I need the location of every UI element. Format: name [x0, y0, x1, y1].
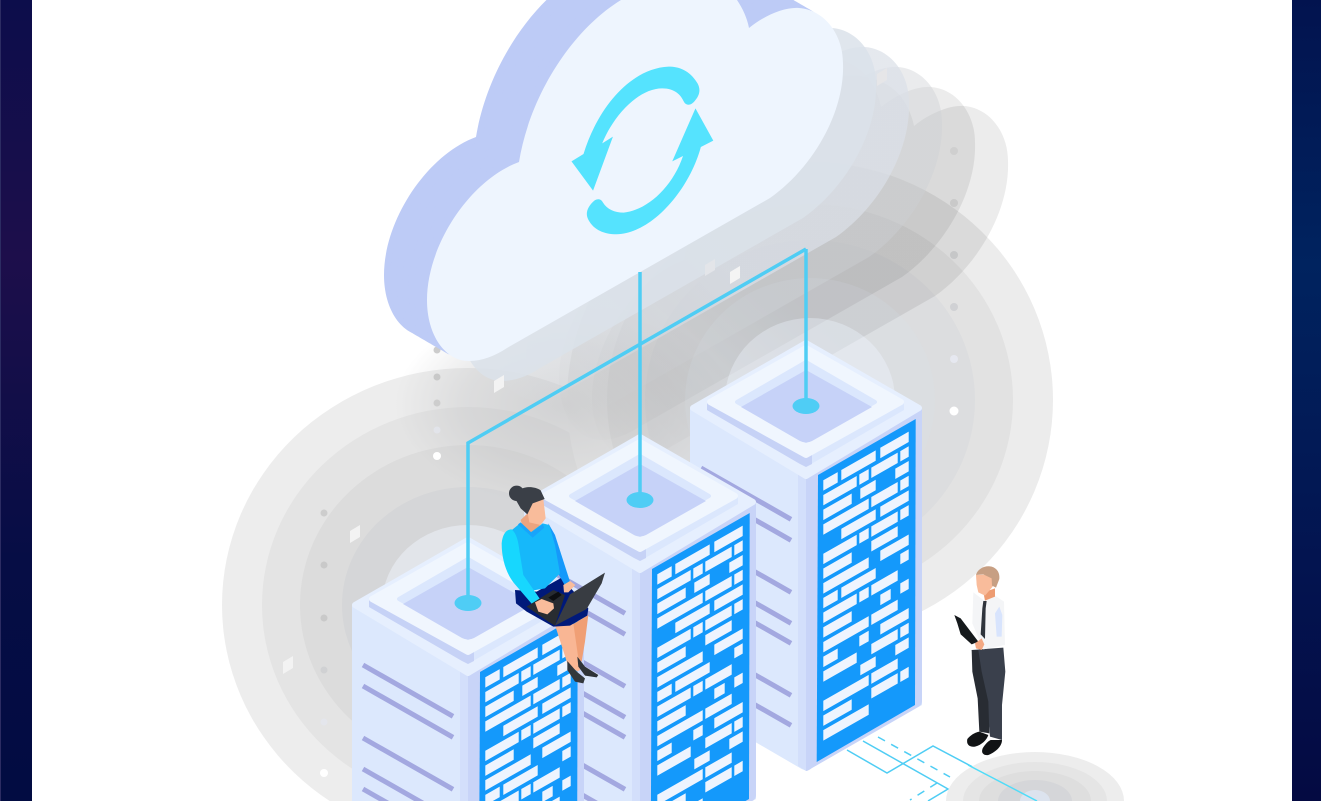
scattered dots: centre column — [433, 346, 441, 460]
trousers — [972, 648, 1005, 740]
hair — [976, 566, 999, 588]
concentric rings: left group — [222, 368, 714, 801]
shoes — [967, 732, 1002, 755]
far arm — [548, 523, 570, 586]
inner ring glow over shadows — [685, 278, 935, 522]
soft shadow under cloud — [395, 303, 735, 507]
hands — [535, 581, 575, 614]
node left — [454, 595, 482, 611]
ground circuit lines — [847, 737, 1037, 801]
sleeve shading — [995, 607, 1002, 637]
cloud extruded side — [384, 0, 836, 357]
node middle — [626, 492, 654, 508]
cloud stacked shadows — [460, 0, 1008, 459]
torso — [510, 523, 560, 592]
server tower left — [352, 537, 584, 801]
man with clipboard — [954, 566, 1005, 755]
neck — [983, 588, 995, 601]
node right — [792, 398, 820, 414]
sync icon — [571, 67, 713, 234]
server tower right — [690, 340, 922, 771]
connector cable middle — [638, 272, 642, 500]
laptop — [527, 573, 605, 626]
connector cable right — [804, 249, 808, 405]
cloud front face — [427, 0, 843, 361]
collar — [518, 522, 544, 538]
face — [976, 574, 993, 596]
cloud — [384, 0, 843, 361]
server tower middle — [524, 434, 756, 801]
tie — [981, 601, 987, 639]
left dark band — [0, 0, 32, 801]
small white tiles — [283, 68, 887, 674]
scattered dots: right column — [950, 147, 958, 416]
shirt — [972, 592, 1005, 649]
legs — [572, 615, 588, 662]
hair — [509, 486, 545, 514]
concentric rings: right group — [567, 162, 1053, 638]
woman with laptop — [502, 486, 605, 683]
hand — [975, 638, 984, 650]
right dark band — [1292, 0, 1321, 801]
connector cable left and bridge — [468, 249, 806, 603]
clipboard — [954, 615, 978, 644]
ground rings — [946, 752, 1124, 801]
skirt — [515, 578, 588, 627]
near arm — [502, 529, 541, 606]
scattered dots: left column — [320, 510, 328, 777]
neck and face — [521, 512, 540, 534]
shoes — [577, 657, 598, 677]
